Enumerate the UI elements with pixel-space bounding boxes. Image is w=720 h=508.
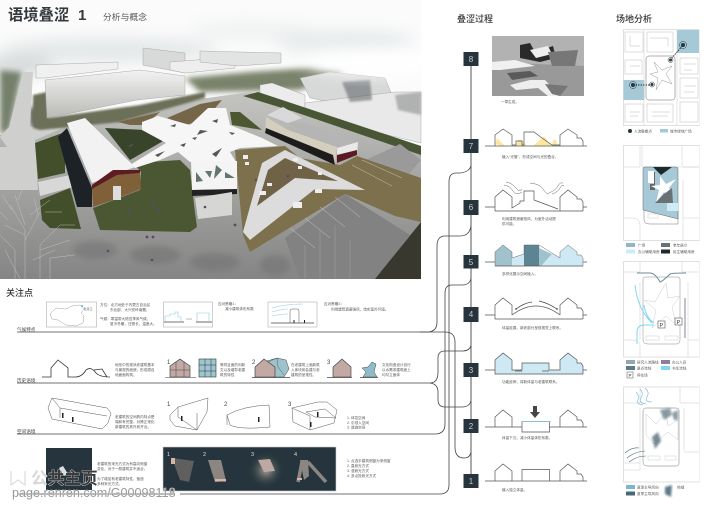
light list: 3. 漫射光方式 <box>347 468 369 473</box>
step 3 <box>464 353 587 384</box>
space list: 3. 遗迹空间 <box>347 424 366 430</box>
light list: 1. 点选手建筑侧窗为采侧窗 <box>347 458 391 463</box>
legend map 1: 人流集散点 <box>634 128 652 134</box>
title: 语境叠涩 <box>8 6 69 24</box>
plaza rocks <box>243 155 322 208</box>
aerial rendering <box>0 0 445 279</box>
house with blue shape <box>252 358 290 378</box>
parking signs <box>658 318 682 329</box>
space text <box>115 414 155 429</box>
title: 1 <box>78 7 86 24</box>
legend map 2 <box>626 242 695 254</box>
strategy 1 text: 应对策略1： <box>218 301 238 306</box>
light text: 老建筑的采光方式为有高向侧窗 <box>97 461 148 466</box>
roads and blocks <box>625 30 698 125</box>
history text 1: 筑的特性 <box>220 372 235 377</box>
caption 6: 利用建筑遮蔽抵风，为室外活动提 <box>502 216 556 221</box>
map 4: wind <box>623 387 700 482</box>
house and blob <box>327 359 378 378</box>
step 4 <box>464 298 587 330</box>
climate notes <box>100 302 157 326</box>
right paved parking <box>345 144 421 192</box>
space list: 2. 引领入空间 <box>347 420 369 425</box>
strategy 2 text: 应对策略2： <box>324 301 344 306</box>
light studies: 1 <box>167 452 170 458</box>
nodes <box>631 43 685 87</box>
brown courtyards <box>118 112 160 125</box>
dark tree corner <box>375 222 421 279</box>
tree shadow blotches <box>73 241 290 275</box>
strategy 1 text <box>218 301 254 311</box>
box 2 <box>227 405 270 428</box>
map 1: nodes <box>624 30 700 126</box>
step box 3: 3 <box>469 366 474 375</box>
panel: space row <box>48 398 369 430</box>
step box 5: 5 <box>469 258 474 267</box>
legend map 3: 办公人员 <box>672 360 687 364</box>
watermark: 公共主页 <box>31 469 98 488</box>
strategy 2 text: 利用建筑遮蔽强风，结实室外环境。 <box>331 306 388 312</box>
climate notes: 夏冷冬暖，日照长，温差大。 <box>110 321 157 326</box>
dark panel <box>163 447 336 491</box>
panel: light row <box>46 447 391 491</box>
history text 1: 等同且面的利新 <box>220 362 246 367</box>
brown ground <box>235 146 421 252</box>
step 8 <box>464 36 584 104</box>
section 2 <box>485 410 587 432</box>
fog clouds <box>0 22 415 74</box>
old brick building <box>58 128 92 207</box>
caption 3: 功能延伸，将新体量与老建筑联系。 <box>502 379 560 384</box>
history text 3: 均匀立面体 <box>382 372 400 377</box>
lower glazed box <box>191 161 237 190</box>
label: space: 空间语境 <box>17 428 36 435</box>
step 6 <box>464 182 587 226</box>
strategy 2 text <box>324 301 388 312</box>
timeline spine <box>470 58 472 482</box>
label: history: 历史语境 <box>17 377 36 384</box>
history text: 地面面构筑。 <box>115 372 137 377</box>
section heading: focus points: 关注点 <box>6 287 33 298</box>
watermark <box>11 469 176 500</box>
history text 2 <box>291 362 320 377</box>
history text <box>115 362 155 377</box>
climate notes: 东北部，大兴安岭南麓。 <box>110 307 150 312</box>
climate notes: 方位：北方地处于内蒙古自治区 <box>100 302 151 307</box>
light text: 多种采光方式。 <box>97 481 122 486</box>
down arrow <box>530 406 540 418</box>
light text: 为了增加有老建筑特性，营造 <box>97 476 144 481</box>
strategy 1 text: 减小建筑体形系数 <box>225 306 254 311</box>
right ramp plaza <box>243 150 365 240</box>
history text 1: 文以及增彰老建 <box>220 367 246 372</box>
caption 2: 体量下沉，减小体量体形系数。 <box>502 435 552 440</box>
legend map 3: 书生流线 <box>672 366 687 370</box>
number 2: 2 <box>224 402 228 408</box>
space text: 新建筑的其外到开近。 <box>115 424 151 429</box>
china map <box>46 302 96 327</box>
legend map 2: 民生辅助用房 <box>673 249 695 254</box>
far transparent buildings <box>36 48 421 143</box>
light text: 变化，对于一般建筑并不适合。 <box>97 466 147 471</box>
title <box>8 6 147 24</box>
bare trees <box>0 190 350 279</box>
history text 3: 文化构造设计自行 <box>382 362 411 367</box>
section 4 <box>485 298 587 319</box>
history text 2: 在老建筑上面新筑 <box>291 362 320 367</box>
summer wind <box>636 388 652 405</box>
step box 4: 4 <box>469 310 474 319</box>
space text: 老建筑的空间具内特点是 <box>115 414 155 419</box>
caption 4: 体量延展，新老部分呈现视觉上联系。 <box>502 325 563 330</box>
section 3 <box>485 353 587 374</box>
step 5 <box>464 245 587 276</box>
node links <box>633 44 684 85</box>
long section box <box>48 398 111 429</box>
dark square <box>46 448 92 490</box>
lower parking <box>285 194 410 279</box>
climate notes: 气候：寒温带大陆性季风气候， <box>100 316 150 321</box>
china map: 牡丹江 <box>84 307 93 311</box>
step box 7: 7 <box>469 142 474 151</box>
space list: 1. 体控空间 <box>347 415 366 420</box>
blue window grid <box>199 359 216 377</box>
section 5 <box>485 245 587 266</box>
step box 2: 2 <box>469 422 474 431</box>
caption 8: 一草生成。 <box>501 99 519 104</box>
section 7 <box>485 129 587 146</box>
caption 6 <box>502 216 556 226</box>
roof skylights <box>128 119 235 157</box>
box 3 <box>292 402 337 430</box>
grass under far buildings <box>33 92 205 130</box>
light list: 2. 直射光方式 <box>347 463 369 468</box>
step box 6: 6 <box>469 203 474 212</box>
number 1: 1 <box>167 402 171 408</box>
step box 1: 1 <box>469 477 474 486</box>
node rings <box>630 42 686 88</box>
terrain profile <box>42 360 110 377</box>
history text 2: 建筑的呈堆性。 <box>291 372 316 377</box>
number 3: 3 <box>327 360 331 366</box>
routes <box>637 273 686 282</box>
caption 1: 植入独立体量。 <box>502 487 527 492</box>
legend map 3: 研究人流路线 <box>637 360 659 364</box>
right top fog <box>305 50 445 74</box>
number 2: 2 <box>252 360 256 366</box>
legend map 3: 景点流线 <box>637 366 652 370</box>
connector lines <box>17 165 471 494</box>
caption 6: 供可能。 <box>502 221 516 226</box>
step 1 <box>464 464 587 492</box>
lawns <box>35 132 65 179</box>
render of massing <box>492 36 584 96</box>
light list: 4. 多点投射光方式 <box>347 473 377 478</box>
box 1 <box>170 398 208 430</box>
legend map 4: 地域 <box>677 484 685 490</box>
light text <box>97 461 148 486</box>
space text: 端和有完整，对跨正常化 <box>115 419 155 424</box>
caption 7: 植入“光管”，形成空间与光的叠合。 <box>502 154 558 159</box>
parking signs: P <box>660 323 664 329</box>
legend map 1 <box>628 128 692 134</box>
left road <box>0 72 63 190</box>
legend map 3: 停车场 <box>637 372 648 378</box>
step 2 <box>464 406 587 440</box>
strategy 2 diagram <box>268 302 317 327</box>
dark parts in far right block <box>342 80 372 102</box>
step box 8: 8 <box>469 55 474 64</box>
watermark: page.renren.com/G00098118 <box>12 486 176 500</box>
light list <box>347 458 391 478</box>
legend map 3 <box>626 360 687 378</box>
history text 3 <box>382 362 411 377</box>
shelter zones <box>652 408 678 449</box>
star white roof <box>130 108 278 168</box>
history text 1 <box>220 362 246 377</box>
history text 2: 入体块体会建与老 <box>291 367 320 372</box>
parking signs: P <box>676 320 680 326</box>
label: climate: 气候特点 <box>17 326 36 333</box>
right old building <box>265 117 337 165</box>
site star <box>650 62 672 90</box>
history text 3: 以水需求建筑面上 <box>382 367 411 372</box>
caption 5: 多样化展示空间植入。 <box>502 271 538 276</box>
pink house grid <box>165 359 196 378</box>
strategy 1 diagram <box>164 302 212 327</box>
step 7 <box>464 129 587 159</box>
legend map 3: P <box>628 373 632 378</box>
number 1: 1 <box>167 360 171 366</box>
light studies: 3 <box>251 452 254 458</box>
map 2: zoning <box>623 146 700 240</box>
central grass patches <box>230 112 262 130</box>
legend map 4 <box>626 484 685 497</box>
legend map 4: 夏季主导风向 <box>637 484 659 490</box>
legend map 2: 办公辅助用房 <box>638 249 660 254</box>
panel: history row <box>42 358 411 378</box>
heading: site analysis: 场地分析 <box>616 13 652 24</box>
section 6 <box>485 182 587 211</box>
section 1 <box>485 464 587 481</box>
space list <box>347 415 369 430</box>
winter wind <box>625 448 646 462</box>
ground <box>0 92 421 279</box>
legend map 2: 广场 <box>638 242 646 248</box>
plaza blocks <box>624 30 699 100</box>
people <box>107 175 289 261</box>
legend map 4: 夏季主导风向 <box>637 491 659 496</box>
heading: process: 叠涩过程 <box>457 13 493 24</box>
title: 分析与概念 <box>103 11 147 22</box>
history text: 地形中的现状老建筑基本 <box>115 362 155 367</box>
legend map 1: 城市绿地广场 <box>670 128 692 134</box>
right grass strip <box>243 92 421 155</box>
history text: 与景观的面貌，形成原自 <box>115 367 155 372</box>
panel: climate row <box>46 301 388 327</box>
number 3: 3 <box>288 402 292 408</box>
background trees <box>0 68 345 135</box>
map 3: circulation <box>623 262 700 357</box>
light studies: 2 <box>203 452 206 458</box>
legend map 2: 老年居众 <box>673 242 688 248</box>
light studies: 4 <box>294 452 297 458</box>
road spur <box>38 175 73 196</box>
light studies <box>167 452 326 488</box>
